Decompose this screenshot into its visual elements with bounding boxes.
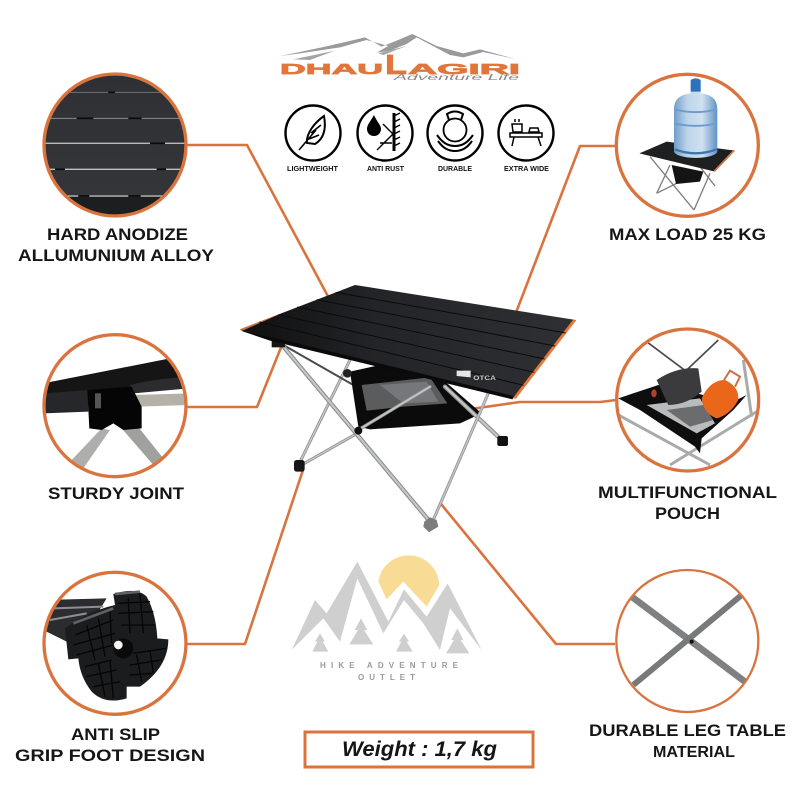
label: anti slip: ANTI SLIP <box>71 725 160 744</box>
orange edges <box>513 319 576 399</box>
panel: grip foot detail <box>43 572 186 714</box>
feet <box>272 337 508 532</box>
label: extra wide: EXTRA WIDE <box>504 164 549 173</box>
label: multifunctional pouch: MULTIFUNCTIONAL <box>598 483 777 502</box>
panel: sturdy joint detail <box>43 335 190 477</box>
table brand mark <box>457 371 497 382</box>
label: multifunctional pouch <box>598 483 777 523</box>
weight box <box>305 732 533 767</box>
logo: Dhaulagiri Adventure Life <box>280 34 520 82</box>
front legs <box>283 347 502 522</box>
ring <box>44 335 186 477</box>
orange kettle <box>702 380 738 418</box>
small table legs <box>650 157 715 210</box>
ring <box>616 74 758 216</box>
label: multifunctional pouch: POUCH <box>655 504 720 523</box>
ring <box>44 74 186 216</box>
connector lines <box>187 145 616 644</box>
ring <box>616 570 758 712</box>
logo wordmark: L <box>385 49 407 80</box>
logo wordmark: DHAU <box>280 61 383 78</box>
table brand mark: OTCA <box>473 376 497 382</box>
icon: anti rust <box>358 106 412 173</box>
label: anti slip <box>15 725 205 765</box>
label: sturdy joint: STURDY JOINT <box>48 484 185 503</box>
rubber foot <box>65 591 168 701</box>
small table top <box>639 142 735 172</box>
slat grooves <box>259 292 566 385</box>
panel: max load photo <box>616 74 758 216</box>
label: lightweight: LIGHTWEIGHT <box>287 164 338 173</box>
label: durable leg <box>589 721 786 761</box>
water bottle <box>674 84 717 158</box>
label: anti rust: ANTI RUST <box>367 164 404 173</box>
label: hard anodize <box>18 225 215 265</box>
watermark text: HIKE ADVENTURE <box>320 661 459 670</box>
weight box: Weight : 1,7 kg <box>342 738 497 761</box>
ring <box>44 572 186 714</box>
leg tubes <box>46 598 107 642</box>
frame tubes <box>618 360 757 465</box>
main table <box>240 285 576 532</box>
icon: durable <box>428 106 482 173</box>
label: durable: DURABLE <box>438 164 472 173</box>
ring <box>617 329 759 471</box>
pouch <box>350 365 482 429</box>
label: anti slip: GRIP FOOT DESIGN <box>15 746 205 765</box>
watermark graphic <box>292 555 482 653</box>
small pouch <box>672 165 703 184</box>
pot <box>657 368 702 405</box>
legs <box>72 428 110 468</box>
back legs <box>283 345 358 465</box>
icon: extra wide <box>498 106 554 173</box>
watermark: hike adventure outlet <box>292 555 482 682</box>
table front thickness <box>240 329 513 399</box>
label: hard anodize: HARD ANODIZE <box>47 225 188 244</box>
table edge <box>46 359 178 394</box>
label: durable leg: MATERIAL <box>653 744 735 761</box>
panel: leg material detail <box>616 570 758 712</box>
label: max load: MAX LOAD 25 KG <box>609 225 766 244</box>
panel: aluminium surface detail <box>40 70 190 220</box>
mesh pouch <box>618 385 747 453</box>
watermark: hike adventure outlet: OUTLET <box>358 673 415 682</box>
label: durable leg: DURABLE LEG TABLE <box>589 721 786 740</box>
table top <box>240 285 576 398</box>
panel: pouch detail <box>617 329 759 471</box>
joint block <box>87 387 142 430</box>
icon: lightweight <box>286 106 340 173</box>
label: hard anodize: ALLUMUNIUM ALLOY <box>18 246 215 265</box>
logo wordmark: AGIRI <box>408 61 520 78</box>
logo mountains <box>280 34 517 60</box>
logo tagline: Adventure Life <box>392 72 520 82</box>
logo wordmark <box>280 49 520 80</box>
